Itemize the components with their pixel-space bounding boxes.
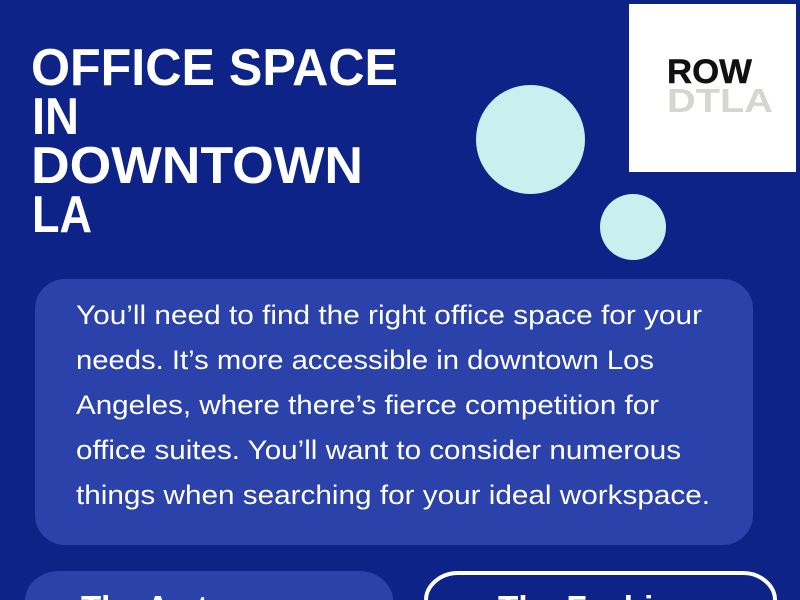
title: OFFICE SPACE xyxy=(31,39,398,97)
title: IN xyxy=(32,88,79,146)
text block: introduction: things when searching for your ideal workspace. xyxy=(76,480,710,510)
logo: ROW DTLA: ROW xyxy=(667,53,753,91)
icon: large decorative circle xyxy=(476,85,585,194)
title: LA xyxy=(32,186,92,244)
icon: small decorative circle xyxy=(600,194,666,260)
logo: ROW DTLA: DTLA xyxy=(667,82,773,119)
panel: The Arts xyxy=(25,571,393,600)
title xyxy=(31,39,398,244)
logo: ROW DTLA xyxy=(629,4,796,172)
text block: introduction: needs. It’s more accessible in downtown Los xyxy=(76,345,654,375)
panel: introduction text xyxy=(35,279,753,545)
text block: introduction: You’ll need to find the right office space for your xyxy=(76,300,702,330)
text block: introduction: Angeles, where there’s fierce competition for xyxy=(76,390,659,420)
text block: introduction: office suites. You’ll want to consider numerous xyxy=(76,435,681,465)
panel: The Fashion xyxy=(426,573,775,600)
text block: introduction xyxy=(76,300,710,510)
title: DOWNTOWN xyxy=(31,137,363,195)
